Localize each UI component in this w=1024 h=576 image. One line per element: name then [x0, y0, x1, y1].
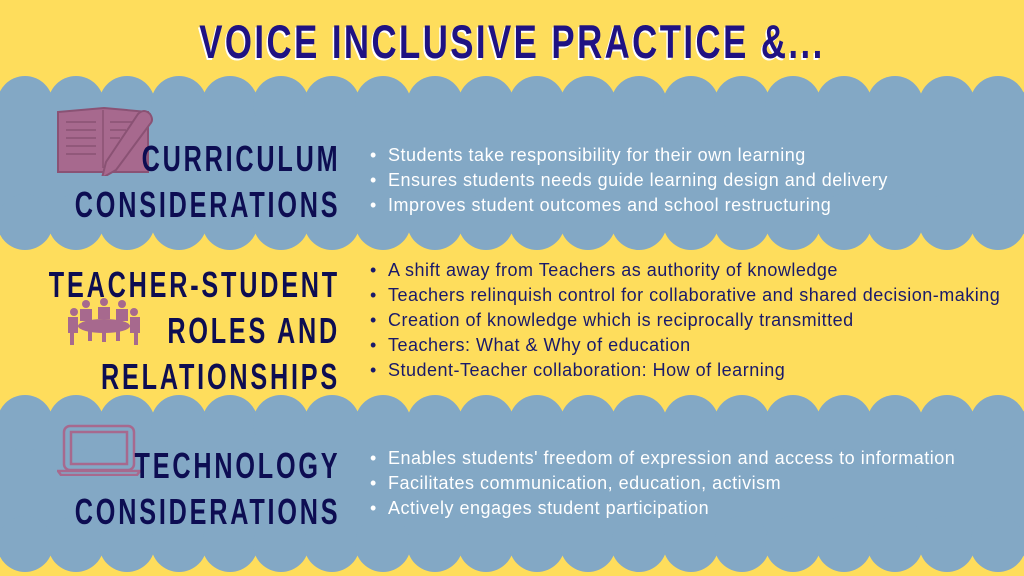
heading: curriculum: CURRICULUM: [141, 138, 340, 179]
bullets: technology: Enables students' freedom of expression and access to information: [388, 448, 955, 468]
icon: meeting table: [68, 298, 140, 345]
bullets: technology: [370, 448, 955, 518]
icon: book and pencil: [57, 107, 153, 176]
heading: curriculum: [74, 138, 340, 225]
heading: teacher-student: [49, 264, 340, 397]
bullets: teacher-student: Creation of knowledge which is reciprocally transmitted: [388, 310, 854, 330]
icon: laptop: [57, 424, 140, 476]
bullets: technology: Actively engages student participation: [388, 498, 709, 518]
title: VOICE INCLUSIVE PRACTICE &...: [199, 15, 825, 68]
heading: technology: [74, 445, 340, 532]
bullets: curriculum: [370, 145, 888, 215]
bullets: teacher-student: Teachers: What & Why of education: [388, 335, 691, 355]
heading: curriculum: CONSIDERATIONS: [74, 184, 340, 225]
heading: teacher-student: TEACHER-STUDENT: [49, 264, 340, 305]
bullets: teacher-student: A shift away from Teachers as authority of knowledge: [388, 260, 838, 280]
heading: teacher-student: ROLES AND: [167, 310, 340, 351]
bullets: curriculum: Ensures students needs guide learning design and delivery: [388, 170, 888, 190]
bullets: curriculum: Improves student outcomes and school restructuring: [388, 195, 831, 215]
heading: technology: TECHNOLOGY: [134, 445, 340, 486]
heading: teacher-student: RELATIONSHIPS: [101, 356, 340, 397]
bullets: teacher-student: [370, 260, 1000, 380]
bullets: technology: Facilitates communication, education, activism: [388, 473, 781, 493]
heading: technology: CONSIDERATIONS: [74, 491, 340, 532]
bullets: curriculum: Students take responsibility for their own learning: [388, 145, 806, 165]
bullets: teacher-student: Teachers relinquish control for collaborative and shared decision-making: [388, 285, 1000, 305]
bullets: teacher-student: Student-Teacher collaboration: How of learning: [388, 360, 785, 380]
